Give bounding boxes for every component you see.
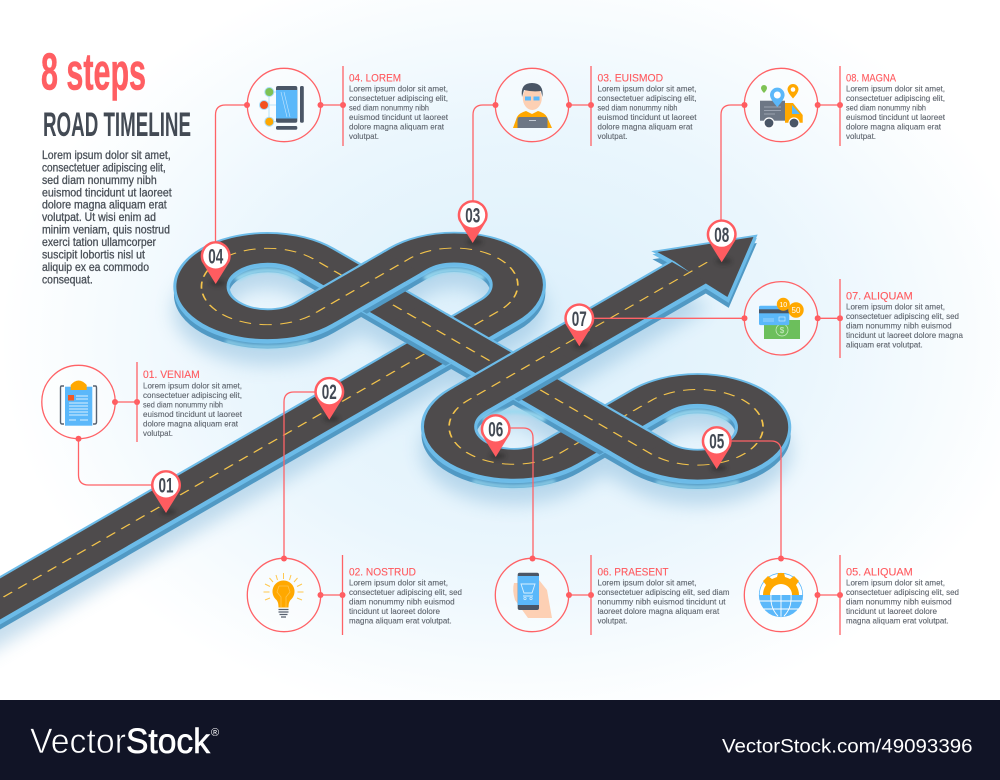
marker ring xyxy=(42,362,140,442)
text: magna aliquam erat volutpat. xyxy=(349,616,452,626)
step 03 block xyxy=(492,66,697,146)
footer band xyxy=(0,700,1000,780)
icon: phone xyxy=(260,86,304,130)
text: nonummy nibh euismod tincidunt ut xyxy=(598,596,726,606)
marker ring xyxy=(495,555,594,635)
text: volutpat. xyxy=(598,616,628,626)
text: Lorem ipsum dolor sit amet, xyxy=(349,84,448,94)
intro paragraph: aliquip ex ea commodo xyxy=(42,260,149,274)
text: consectetuer adipiscing elit, xyxy=(143,390,242,400)
intro paragraph: exerci tation ullamcorper xyxy=(42,235,156,249)
marker ring xyxy=(492,66,594,146)
pin 05: 05 xyxy=(709,430,724,454)
text: 03. EUISMOD xyxy=(598,72,663,84)
text: tincidunt ut laoreet dolore xyxy=(349,606,440,616)
text: consectetuer adipiscing elit, xyxy=(349,93,448,103)
text: 08. MAGNA xyxy=(846,72,896,84)
pin 02: 02 xyxy=(322,381,337,404)
pin 04: 04 xyxy=(208,246,223,268)
text: Lorem ipsum dolor sit amet, xyxy=(846,84,945,94)
text xyxy=(846,290,963,350)
step 04 block xyxy=(244,66,449,146)
text: consectetuer adipiscing elit, sed diam xyxy=(598,587,730,597)
icon: card, cash and coins xyxy=(759,298,804,339)
text: 06. PRAESENT xyxy=(598,566,669,578)
icon: card, cash and coins: $ xyxy=(780,326,785,335)
text: diam nonummy nibh euismod xyxy=(846,320,952,330)
text: magna aliquam erat volutpat. xyxy=(846,616,949,626)
text: dolore magna aliquam erat xyxy=(598,122,693,132)
text: euismod tincidunt ut laoreet xyxy=(846,112,946,122)
icon: clipboard xyxy=(60,380,96,426)
text: Lorem ipsum dolor sit amet, xyxy=(598,578,696,588)
icon: globe and gear xyxy=(759,573,803,617)
text: tincidunt ut laoreet dolore xyxy=(846,606,937,616)
connector lines xyxy=(78,105,781,558)
text: dolore magna aliquam erat xyxy=(143,418,239,428)
text: 07. ALIQUAM xyxy=(846,290,913,302)
marker ring xyxy=(744,555,843,635)
text: euismod tincidunt ut laoreet xyxy=(598,112,697,122)
text: sed diam nonummy nibh xyxy=(143,400,223,410)
footer logo: Stock xyxy=(126,722,210,761)
text: consectetuer adipiscing elit, xyxy=(598,93,696,103)
text: sed diam nonummy nibh xyxy=(846,102,926,112)
step 06 block xyxy=(495,555,730,635)
text: volutpat. xyxy=(143,428,173,438)
step 05 block xyxy=(744,555,959,635)
pin 03: 03 xyxy=(465,204,480,228)
step 07 block xyxy=(742,279,963,358)
inner and outer wall highlights xyxy=(228,208,737,559)
icon: person at laptop xyxy=(513,83,552,128)
road overpass: diagonal over straight xyxy=(407,313,495,364)
marker ring xyxy=(742,66,843,146)
intro paragraph xyxy=(42,148,172,286)
road shadow xyxy=(0,154,874,780)
text: consectetuer adipiscing elit, sed xyxy=(846,587,959,597)
marker ring xyxy=(247,555,346,635)
text: consectetuer adipiscing elit, sed xyxy=(846,311,959,321)
text: consectetuer adipiscing elit, sed xyxy=(349,587,462,597)
text: tincidunt ut laoreet dolore magna xyxy=(846,330,963,340)
intro paragraph: volutpat. Ut wisi enim ad xyxy=(42,210,156,224)
pin 01: 01 xyxy=(158,474,174,498)
text: Lorem ipsum dolor sit amet, xyxy=(846,578,945,588)
text: euismod tincidunt ut laoreet xyxy=(143,409,243,419)
intro paragraph: suscipit lobortis nisl ut xyxy=(42,247,146,261)
text: 05. ALIQUAM xyxy=(846,566,913,578)
text xyxy=(598,72,697,141)
intro paragraph: minim veniam, quis nostrud xyxy=(42,223,170,237)
text: Lorem ipsum dolor sit amet, xyxy=(598,84,696,94)
step 02 block xyxy=(247,555,462,635)
pin 07 xyxy=(564,303,594,349)
road overpass: upper loop over diagonal xyxy=(318,262,403,312)
text: laoreet dolore magna aliquam erat xyxy=(598,606,720,616)
icon: card, cash and coins: 10 xyxy=(779,302,787,309)
step 01 block xyxy=(42,362,243,442)
intro paragraph: consectetuer adipiscing elit, xyxy=(42,160,166,174)
intro paragraph: Lorem ipsum dolor sit amet, xyxy=(42,148,171,162)
text: diam nonummy nibh euismod xyxy=(349,596,455,606)
pin 08 xyxy=(707,219,737,265)
pin 06 xyxy=(481,414,511,460)
text xyxy=(846,566,959,626)
footer logo: Vector xyxy=(30,722,126,761)
text: dolore magna aliquam erat xyxy=(349,122,445,132)
text: Lorem ipsum dolor sit amet, xyxy=(349,578,448,588)
text: sed diam nonummy nibh xyxy=(598,102,678,112)
icon: card, cash and coins: 50 xyxy=(792,306,801,315)
pin 07: 07 xyxy=(572,308,587,331)
text: euismod tincidunt ut laoreet xyxy=(349,112,449,122)
icon: light bulb xyxy=(264,573,304,617)
footer logo: ® xyxy=(211,727,219,739)
text xyxy=(349,566,462,626)
marker ring xyxy=(244,66,346,146)
text: dolore magna aliquam erat xyxy=(846,122,942,132)
heading: road timeline: ROAD TIMELINE xyxy=(43,106,191,144)
intro paragraph: sed diam nonummy nibh xyxy=(42,173,157,187)
road overpass: diagonal over lower loop xyxy=(563,403,648,452)
marker ring xyxy=(742,279,843,358)
text: 02. NOSTRUD xyxy=(349,566,416,578)
pin 06: 06 xyxy=(488,418,503,442)
text: Lorem ipsum dolor sit amet, xyxy=(846,302,945,312)
text: aliquam erat volutpat. xyxy=(846,340,923,350)
text: volutpat. xyxy=(598,131,628,141)
pin 03 xyxy=(458,200,488,246)
text: volutpat. xyxy=(846,131,876,141)
text xyxy=(349,72,449,141)
footer url: VectorStock.com/49093396 xyxy=(722,737,972,758)
pin 02 xyxy=(314,377,344,422)
pin 01 xyxy=(151,470,181,516)
text xyxy=(846,72,946,141)
icon: phone in hand xyxy=(513,573,552,618)
text: 04. LOREM xyxy=(349,72,401,84)
intro paragraph: dolore magna aliquam erat xyxy=(42,198,167,212)
footer logo xyxy=(30,722,219,761)
text: diam nonummy nibh euismod xyxy=(846,596,952,606)
pin 05 xyxy=(702,426,732,472)
pin 08: 08 xyxy=(714,224,729,247)
intro paragraph: euismod tincidunt ut laoreet xyxy=(42,185,172,199)
title: 8 steps: 8 steps xyxy=(41,44,146,102)
text: Lorem ipsum dolor sit amet, xyxy=(143,380,242,390)
text xyxy=(143,369,243,438)
text: consectetuer adipiscing elit, xyxy=(846,93,945,103)
text: sed diam nonummy nibh xyxy=(349,102,429,112)
text xyxy=(598,566,730,626)
step 08 block xyxy=(742,66,946,146)
icon: delivery truck xyxy=(760,84,803,128)
text: volutpat. xyxy=(349,131,379,141)
pin 04 xyxy=(201,241,231,286)
text: 01. VENIAM xyxy=(143,369,200,381)
intro paragraph: consequat. xyxy=(42,272,93,286)
road overpass: arrow road over diagonal xyxy=(472,350,555,398)
